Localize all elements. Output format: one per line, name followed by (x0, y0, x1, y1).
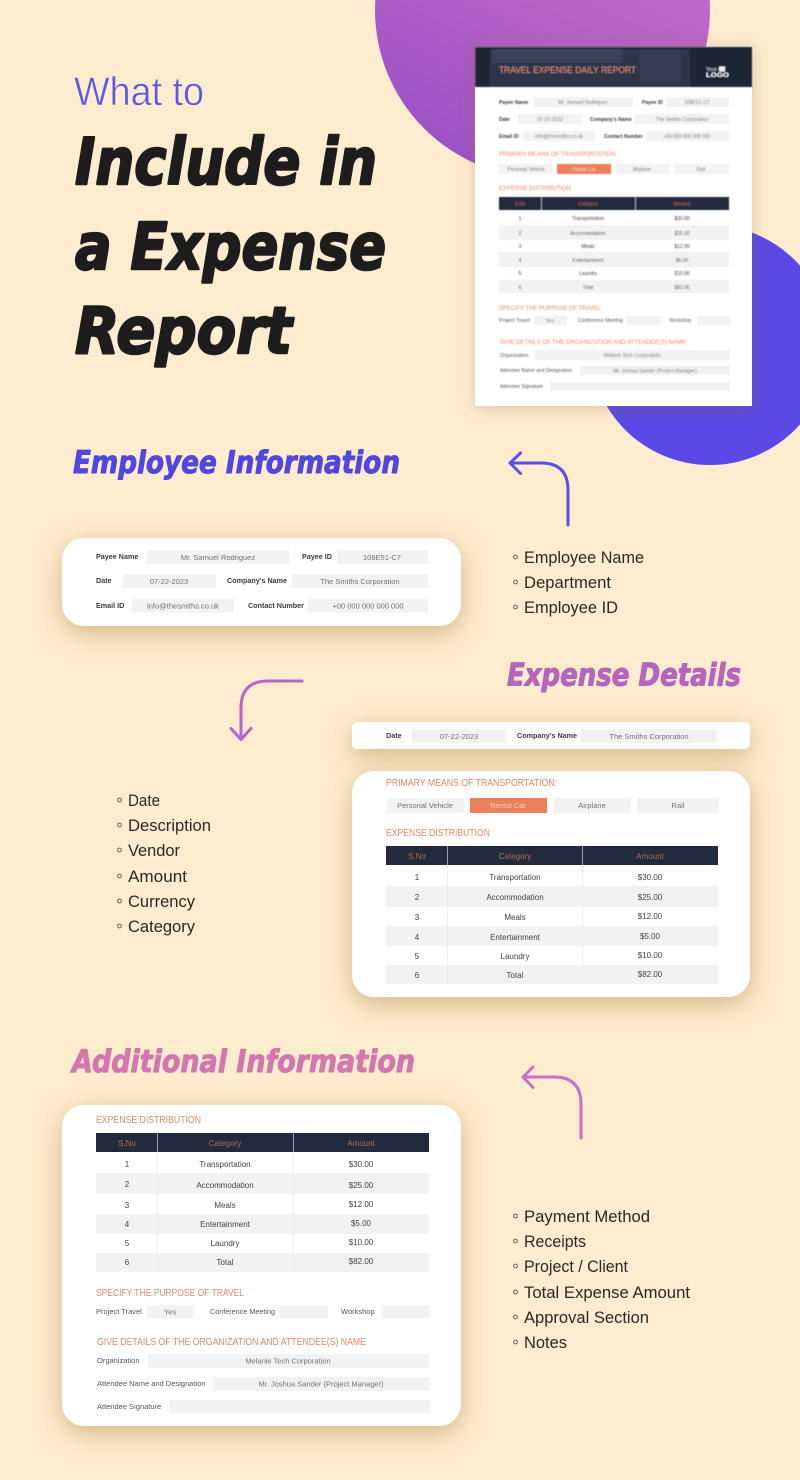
panel: employee information card: Mr. Samuel Rodriguez (181, 553, 255, 562)
panel: employee information card: info@thesmiths.co.uk (147, 602, 219, 610)
expense table: $12.00 (638, 912, 663, 921)
document organization section: Mr. Joshua Sander (Project Manager) (613, 368, 697, 374)
document expense table: $25.00 (674, 231, 690, 237)
document expense table: Transportation (572, 216, 604, 222)
expense table: 4 (415, 933, 420, 942)
document expense table: 5 (519, 271, 522, 277)
document expense table: Meals (581, 244, 595, 250)
document payee fields: The Smiths Corporation (656, 117, 709, 123)
expense table: 4 (125, 1220, 130, 1229)
document expense table: 2 (519, 231, 522, 237)
document expense table: $10.00 (674, 271, 690, 277)
document expense table: Total (583, 285, 593, 291)
travel purpose section: Workshop (341, 1307, 375, 1316)
document expense table: $5.00 (676, 258, 688, 264)
document expense table: 3 (519, 244, 522, 250)
panel: employee information card: Email ID (96, 601, 124, 610)
expense table: $25.00 (638, 893, 663, 902)
list: expense items: Description (128, 816, 211, 835)
expense table: 2 (125, 1180, 130, 1189)
heading: Expense Details: Expense Details (507, 658, 741, 694)
document organization section: Melanie Tech Corporation (604, 353, 661, 359)
travel purpose section: SPECIFY THE PURPOSE OF TRAVEL (96, 1288, 244, 1299)
expense table: Meals (504, 913, 526, 922)
panel: employee information card: Date (96, 576, 112, 585)
document payee fields: 07-22-2023 (537, 117, 563, 123)
title line: Include in: Include in (75, 126, 377, 200)
document expense table: 6 (519, 285, 522, 291)
document expense table: 1 (519, 216, 522, 222)
panel: employee information card: Contact Number (248, 601, 304, 610)
panel: additional information card (62, 1105, 461, 1426)
organization section: Mr. Joshua Sander (Project Manager) (258, 1380, 384, 1388)
document expense table: 4 (519, 258, 522, 264)
title line: What to: What to (74, 70, 204, 114)
list: employee items (514, 548, 644, 617)
expense table: $10.00 (638, 951, 663, 960)
transportation options (387, 798, 719, 813)
expense table: Transportation (199, 1160, 251, 1169)
list: additional items: Receipts (524, 1232, 586, 1251)
list: additional items: Payment Method (524, 1207, 650, 1226)
panel: date and company strip (352, 722, 750, 749)
document transportation section: Personal Vehicle (507, 167, 545, 173)
document organization section (500, 339, 730, 391)
arrow: expense (231, 681, 302, 740)
expense table: Amount (347, 1139, 376, 1148)
panel: expense details card (352, 771, 750, 997)
arrow: employee (510, 453, 568, 525)
expense table: 5 (125, 1239, 130, 1248)
document payee fields: info@thesmiths.co.uk (535, 134, 583, 140)
panel: employee information card: 108E51-C7 (363, 553, 401, 562)
document payee fields: Date (499, 117, 510, 123)
document expense table: S.No (514, 202, 526, 208)
expense table: 3 (415, 913, 420, 922)
document organization section: Attendee Name and Designation (500, 368, 572, 374)
expense table: Category (499, 852, 531, 861)
expense table: 3 (125, 1201, 130, 1210)
list: additional items: Approval Section (524, 1308, 649, 1327)
decorative purple circle (375, 0, 710, 178)
expense table: Total (217, 1258, 234, 1267)
transportation options: Personal Vehicle (397, 801, 453, 810)
expense table: $82.00 (349, 1257, 374, 1266)
panel: date and company strip: 07-22-2023 (440, 732, 478, 741)
list: expense items: Currency (128, 892, 195, 911)
expense table: Amount (636, 852, 665, 861)
document travel purpose section: Yes (546, 318, 555, 324)
organization section: Attendee Name and Designation (97, 1379, 205, 1388)
transportation options: Airplane (578, 801, 606, 810)
travel purpose section (96, 1288, 430, 1318)
transportation options: Rail (672, 801, 685, 810)
arrow: additional (523, 1067, 581, 1138)
document transportation section: Airplane (633, 167, 651, 173)
document payee fields (499, 97, 729, 141)
document header banner: Your (706, 67, 717, 73)
expense table: S.No (118, 1139, 136, 1148)
expense table: Entertainment (490, 933, 541, 942)
document organization section: Organization (500, 353, 529, 359)
document expense table: Amount (673, 202, 691, 208)
document payee fields: Email ID (499, 134, 519, 140)
list: additional items (514, 1207, 690, 1352)
expense table: 2 (415, 893, 420, 902)
expense table: $30.00 (349, 1160, 374, 1169)
organization section (97, 1337, 430, 1413)
list: additional items: Notes (524, 1333, 567, 1352)
title line: Report: Report (75, 295, 294, 369)
list: expense items (118, 791, 211, 936)
list: expense items: Date (128, 791, 160, 810)
document expense table: EXPENSE DISTRIBUTION (499, 185, 571, 192)
expense table: Total (507, 971, 524, 980)
expense table: $5.00 (640, 932, 661, 941)
document header banner (475, 47, 752, 87)
panel: date and company strip: Date (386, 731, 402, 740)
organization section: Melanie Tech Corporation (245, 1356, 331, 1366)
document organization section: Attendee Signature (500, 384, 543, 390)
list: additional items: Total Expense Amount (524, 1283, 690, 1302)
expense table (96, 1133, 429, 1272)
document transportation section: Rental Car (572, 167, 596, 173)
list: employee items: Employee Name (524, 548, 644, 567)
document travel purpose section: Project Travel (499, 318, 530, 324)
organization section: GIVE DETAILS OF THE ORGANIZATION AND ATTENDEE(S) NAME (97, 1337, 366, 1348)
panel: full report document (475, 47, 752, 406)
expense table: Accommodation (196, 1181, 254, 1190)
list: employee items: Department (524, 573, 611, 592)
expense table: 6 (415, 971, 420, 980)
expense distribution heading: EXPENSE DISTRIBUTION (96, 1115, 201, 1126)
document expense table: Laundry (579, 271, 598, 277)
expense table: 6 (125, 1258, 130, 1267)
expense table: $82.00 (638, 970, 663, 979)
panel: employee information card: Company's Name (227, 576, 287, 585)
organization section: Attendee Signature (97, 1402, 161, 1411)
title line: a Expense: a Expense (75, 211, 386, 285)
expense table (386, 846, 718, 984)
list: employee items: Employee ID (524, 598, 618, 617)
document header banner: LOGO (706, 73, 729, 79)
expense table: $30.00 (638, 873, 663, 882)
transportation options: Rental Car (490, 801, 526, 810)
panel: employee information card: Payee ID (302, 552, 332, 561)
document payee fields: Company's Name (590, 117, 632, 123)
expense table: Category (209, 1139, 241, 1148)
document payee fields: +00 000 000 000 000 (663, 134, 711, 140)
expense table: $25.00 (349, 1181, 374, 1190)
document travel purpose section: Conference Meeting (578, 318, 623, 324)
document payee fields: Payee ID (642, 100, 663, 106)
document expense table: $82.00 (674, 285, 690, 291)
expense table: Entertainment (200, 1220, 251, 1229)
list: expense items: Category (128, 917, 195, 936)
list: additional items: Project / Client (524, 1257, 628, 1276)
expense table: 5 (415, 952, 420, 961)
document transportation section (499, 151, 729, 174)
expense table: 1 (125, 1160, 130, 1169)
document payee fields: 108E51-C7 (684, 100, 710, 106)
travel purpose section: Project Travel (96, 1307, 142, 1316)
title (74, 70, 386, 369)
document travel purpose section (499, 305, 730, 325)
document expense table: $30.00 (674, 216, 690, 222)
expense table: Meals (214, 1201, 236, 1210)
document expense table (499, 185, 729, 293)
document payee fields: Mr. Samuel Rodriguez (558, 100, 608, 106)
expense table: 1 (415, 873, 420, 882)
expense table: Accommodation (486, 893, 544, 902)
document payee fields: Payee Name (499, 100, 529, 106)
document expense table: $12.00 (674, 244, 690, 250)
travel purpose section: Conference Meeting (210, 1307, 275, 1316)
list: expense items: Amount (128, 867, 187, 886)
heading: Additional Information: Additional Information (69, 1044, 415, 1080)
panel: date and company strip: Company's Name (517, 731, 577, 740)
document travel purpose section: SPECIFY THE PURPOSE OF TRAVEL (499, 305, 601, 312)
panel: employee information card: Payee Name (96, 552, 138, 561)
expense table: $10.00 (349, 1238, 374, 1247)
expense table: Laundry (501, 952, 529, 961)
expense table: $5.00 (351, 1219, 372, 1228)
panel: employee information card: 07-22-2023 (150, 577, 188, 586)
expense table: Laundry (211, 1239, 239, 1248)
document organization section: GIVE DETAILS OF THE ORGANIZATION AND ATTENDEE(S) NAME (500, 339, 686, 346)
document expense table: Category (578, 202, 599, 208)
expense table: S.No (408, 852, 426, 861)
heading: Employee Information: Employee Information (73, 445, 400, 481)
document payee fields: Contact Number (604, 134, 643, 140)
travel purpose section: Yes (164, 1308, 176, 1316)
document expense table: Accommodation (570, 231, 606, 237)
panel: date and company strip: The Smiths Corporation (609, 732, 689, 741)
transportation heading: PRIMARY MEANS OF TRANSPORTATION: (386, 778, 557, 789)
organization section: Organization (97, 1356, 140, 1365)
document transportation section: Rail (697, 167, 705, 173)
document header banner: TRAVEL EXPENSE DAILY REPORT (499, 65, 636, 75)
expense table: Transportation (489, 873, 541, 882)
panel: employee information card (62, 538, 461, 626)
expense distribution heading: EXPENSE DISTRIBUTION (386, 828, 490, 839)
panel: employee information card: +00 000 000 000 000 (332, 602, 404, 610)
panel: employee information card: The Smiths Corporation (320, 577, 400, 586)
decorative blue circle (590, 225, 800, 465)
list: expense items: Vendor (128, 841, 180, 860)
document travel purpose section: Workshop (669, 318, 692, 324)
document transportation section: PRIMARY MEANS OF TRANSPORTATION: (499, 151, 617, 158)
expense table: $12.00 (349, 1200, 374, 1209)
document expense table: Entertainment (572, 258, 604, 264)
